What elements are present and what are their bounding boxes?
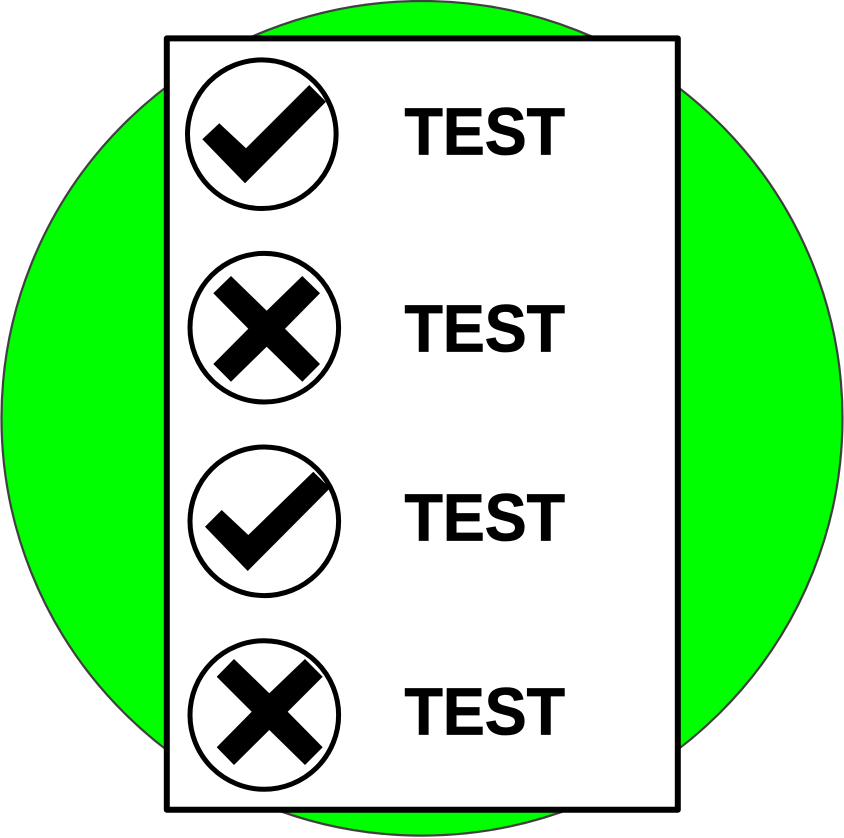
row 3: check	[190, 447, 565, 596]
row 4: cross	[190, 641, 565, 789]
white checklist panel	[167, 38, 678, 810]
label: TEST: TEST	[404, 94, 565, 169]
icon: cross in circle	[190, 641, 339, 789]
row 1: check	[187, 60, 565, 208]
icon: check in circle	[190, 447, 339, 596]
row 2: cross	[190, 253, 565, 402]
label: TEST: TEST	[404, 291, 565, 366]
icon: cross in circle	[190, 253, 339, 402]
label: TEST: TEST	[404, 480, 565, 555]
icon: check in circle	[187, 60, 336, 208]
label: TEST: TEST	[404, 674, 565, 749]
